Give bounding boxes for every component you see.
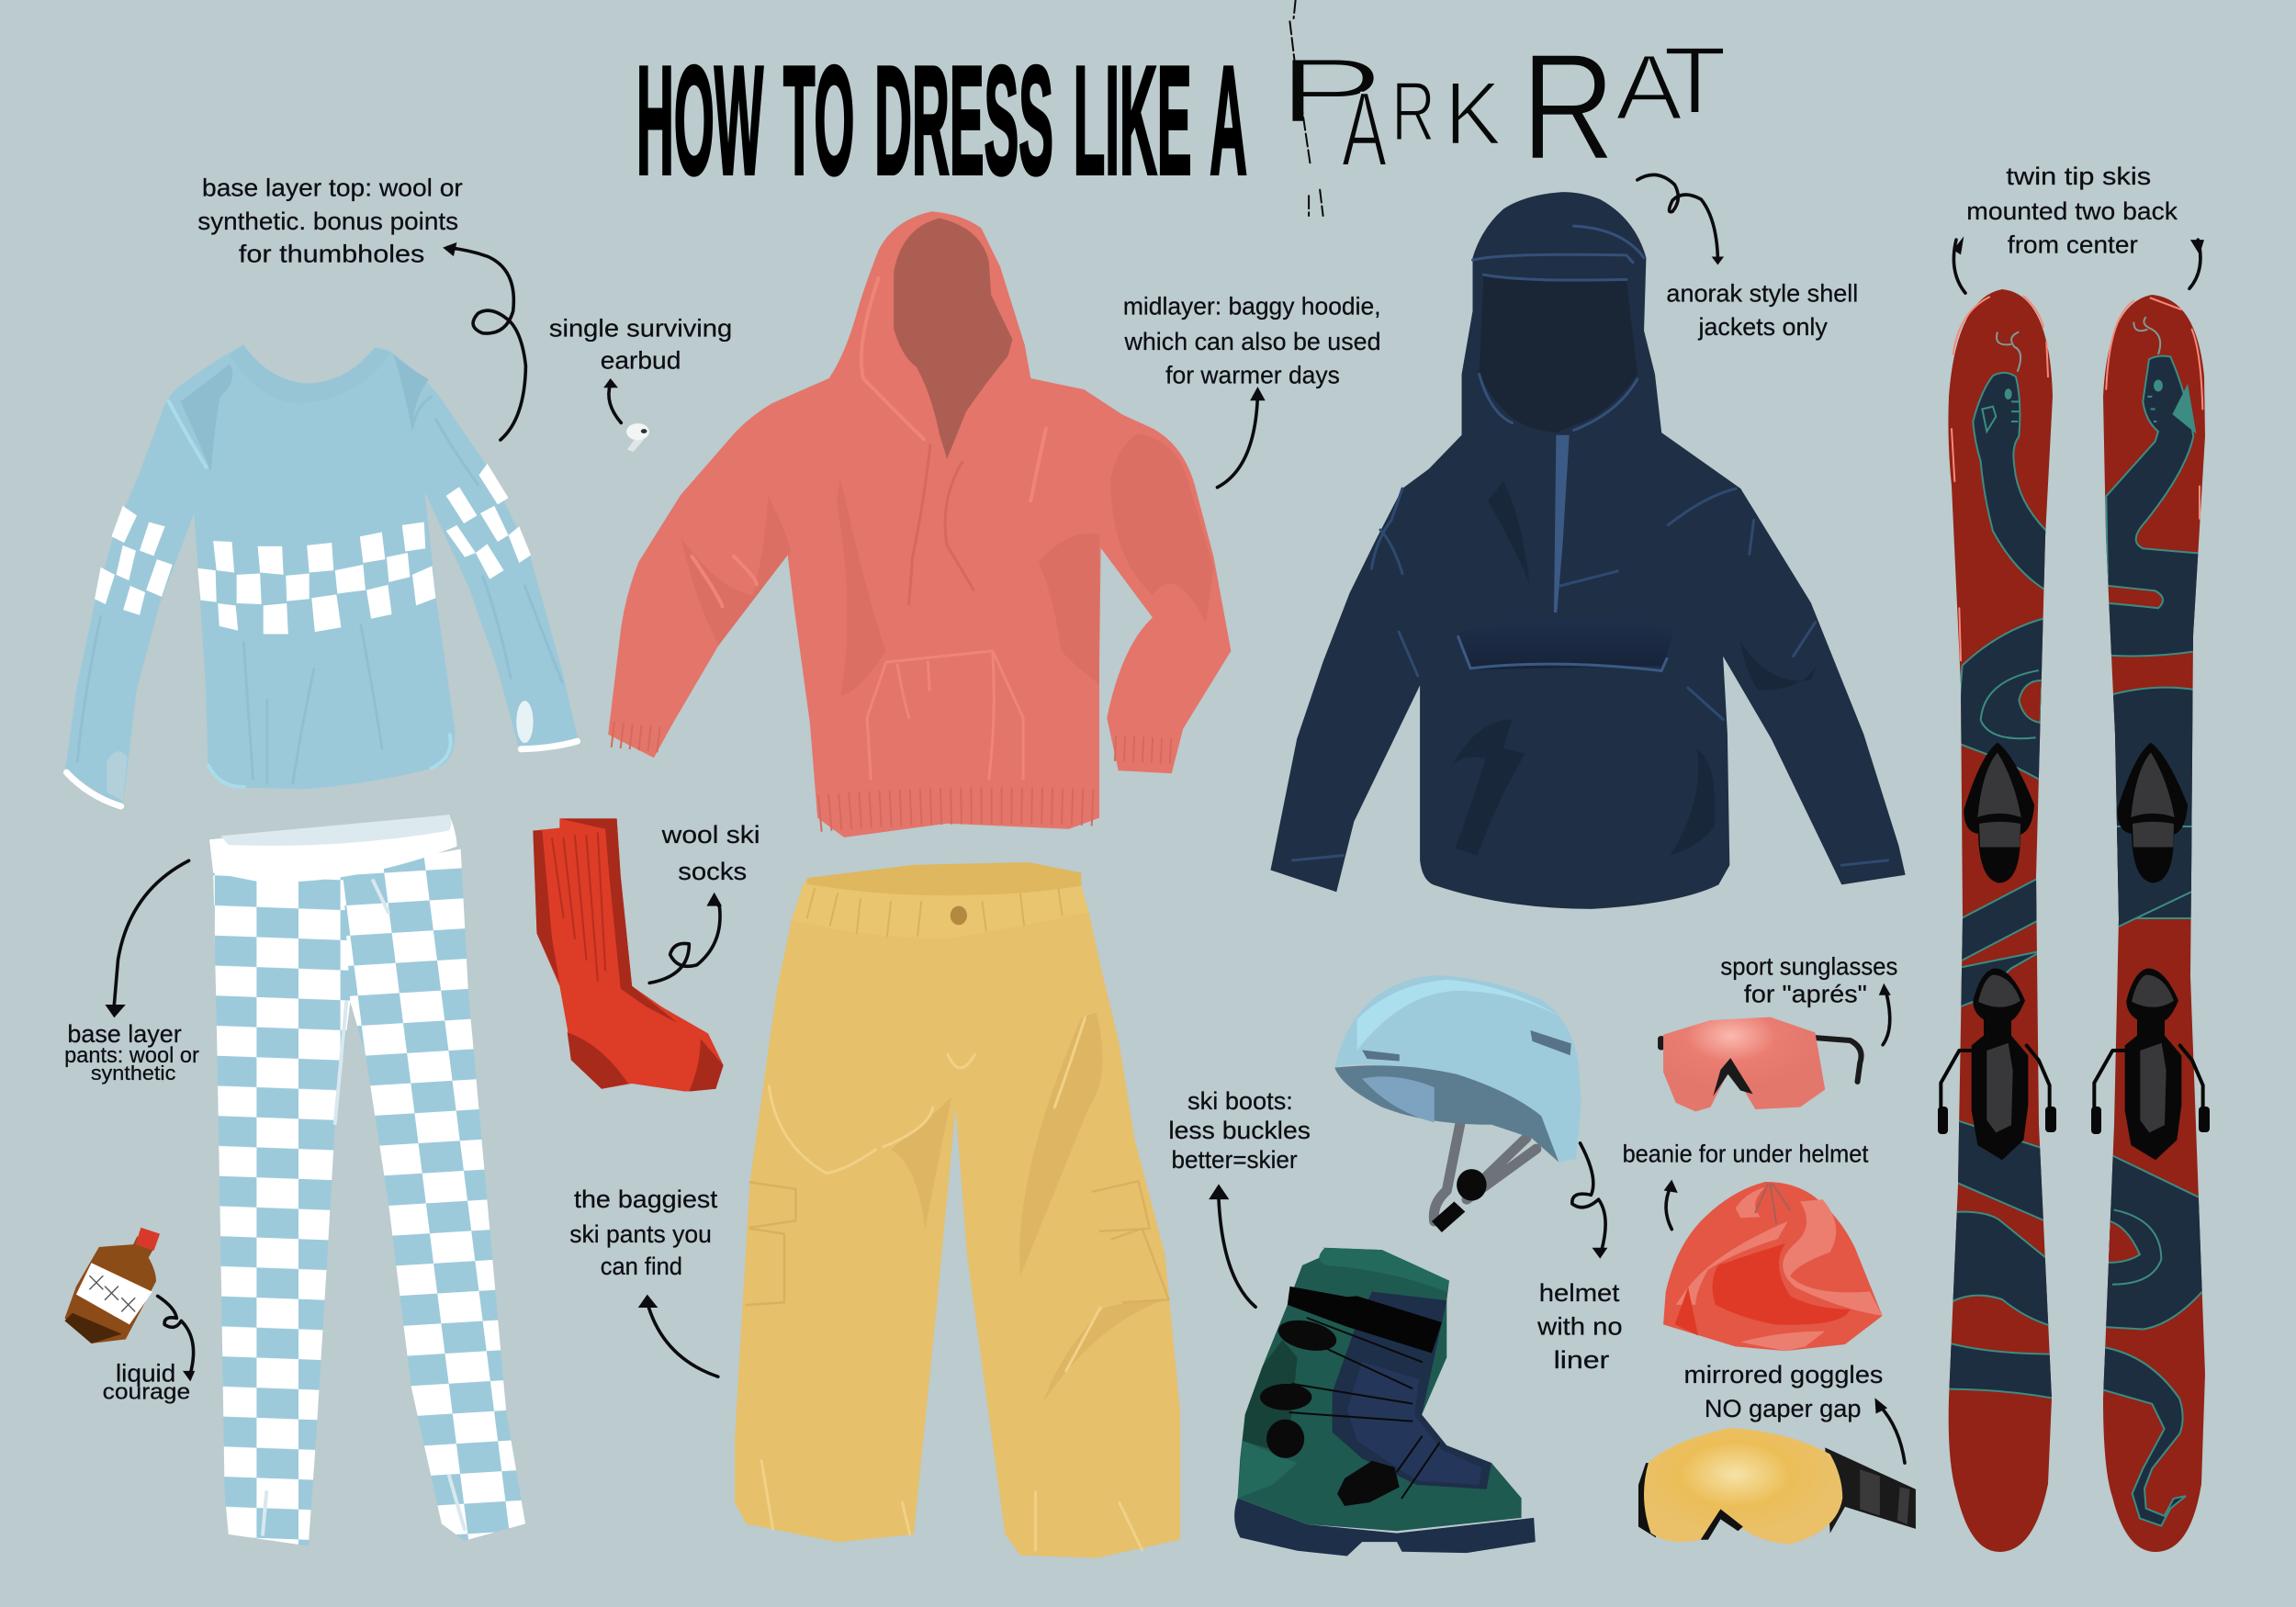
- label: base layer top: base layer top: wool or: [202, 174, 463, 202]
- label: base layer pants: [64, 1019, 199, 1084]
- label xxx: [90, 1276, 135, 1311]
- left sleeve checks: [95, 506, 173, 615]
- nose piece: [1713, 1058, 1753, 1096]
- chest pocket: [1458, 618, 1675, 669]
- label: midlayer: which can also be used: [1124, 327, 1381, 355]
- drawstrings: [909, 445, 974, 603]
- swirl light: [1676, 1187, 1883, 1351]
- arrow: baggiest ski pants: [638, 1295, 718, 1377]
- illustration: hoodie: [608, 211, 1231, 837]
- title: [636, 0, 1727, 216]
- sock heel: [568, 1032, 628, 1089]
- beanie base: [1663, 1182, 1883, 1351]
- illustration: baggy ski pants: [735, 862, 1180, 1558]
- label: ski boots: [1168, 1086, 1311, 1174]
- label: helmet: helmet: [1539, 1278, 1620, 1307]
- zipper: [1554, 435, 1570, 612]
- sock cuff shade: [533, 818, 678, 1023]
- lens: [1644, 1428, 1842, 1545]
- illustration: sport sunglasses: [1658, 1017, 1862, 1111]
- heading: park rat: A: [1615, 37, 1683, 140]
- illustration: base layer pants: [209, 815, 525, 1545]
- illustration: left ski: [1938, 289, 2057, 1552]
- label: socks: socks: [678, 857, 747, 885]
- swirl dark: [1675, 1243, 1850, 1335]
- earbud head: [626, 423, 649, 440]
- label: base layer top: for thumbholes: [239, 239, 424, 267]
- cables: [1289, 1318, 1439, 1498]
- label: base layer top: synthetic. bonus points: [197, 207, 458, 235]
- earbud mesh: [641, 429, 647, 433]
- pants body: [735, 862, 1180, 1558]
- bottle body: [64, 1237, 156, 1343]
- lens: [1663, 1017, 1825, 1111]
- left ski deck: [1948, 289, 2053, 1552]
- label: midlayer: midlayer: baggy hoodie,: [1123, 292, 1381, 320]
- label: base layer pants: base layer: [67, 1019, 182, 1048]
- waistband inner: [220, 815, 451, 846]
- cargo pockets: [747, 1181, 1169, 1305]
- arrows: twin tip skis: [1953, 236, 2204, 293]
- label: base layer top: [197, 174, 463, 267]
- helmet shell: [1334, 975, 1581, 1162]
- left ski edges: [1952, 296, 2048, 660]
- toe buckle: [1337, 1461, 1400, 1506]
- arrow: helmet: [1572, 1143, 1607, 1259]
- buckle one: [1275, 1315, 1340, 1356]
- helmet inner: [1334, 1065, 1559, 1162]
- label: helmet: with no: [1536, 1312, 1623, 1341]
- label: sunglasses: [1720, 951, 1897, 1008]
- label: liquid courage: [103, 1359, 190, 1405]
- shell highlight: [1357, 980, 1561, 1050]
- label: anorak: [1666, 278, 1858, 341]
- label: baggy pants: ski pants you: [569, 1219, 712, 1248]
- annotations: [64, 162, 2178, 1422]
- heading: park rat: P: [1277, 39, 1384, 142]
- heading: park rat: T: [1663, 28, 1727, 134]
- highlights: [761, 1017, 1142, 1550]
- shell shadow: [1243, 1340, 1298, 1455]
- illustration: ski boot: [1234, 1248, 1536, 1556]
- label: liquid courage: liquid: [116, 1359, 175, 1388]
- hem highlight: [169, 401, 451, 787]
- buckle three: [1266, 1420, 1304, 1458]
- arrow: goggles: [1874, 1398, 1905, 1463]
- arrow: anorak: [1638, 174, 1724, 265]
- helmet lining: [1362, 1076, 1435, 1122]
- face opening: [894, 219, 1012, 459]
- arrow: ski boots: [1209, 1184, 1255, 1307]
- chin straps: [1434, 1116, 1536, 1221]
- label: baggy pants: can find: [601, 1252, 682, 1280]
- hem ribbing: [819, 805, 1099, 814]
- label: goggles: NO gaper gap: [1705, 1394, 1861, 1422]
- heading: park rat: A: [1342, 71, 1387, 188]
- shadow folds: [1451, 481, 1819, 856]
- label: midlayer: for warmer days: [1165, 361, 1340, 389]
- label: earbud: [549, 314, 732, 375]
- label: ski boots: better=skier: [1172, 1145, 1298, 1174]
- sock ribs: [552, 833, 605, 981]
- strap clip: [1432, 1202, 1465, 1232]
- label: anorak: jackets only: [1698, 312, 1828, 341]
- pocket trim: [1458, 636, 1667, 670]
- label: goggles: [1684, 1360, 1883, 1422]
- highlights: [692, 278, 1046, 606]
- arrow: liquid courage: [158, 1296, 195, 1381]
- label: socks: [661, 820, 760, 885]
- label: earbud: single surviving: [549, 314, 732, 343]
- sock body: [533, 818, 724, 1092]
- arrow: socks: [649, 893, 722, 983]
- right thumbhole: [516, 701, 534, 743]
- label: beanie: beanie for under helmet: [1623, 1139, 1869, 1167]
- illustration: right ski: [2091, 295, 2210, 1552]
- highlights: [77, 397, 562, 783]
- right ski edges: [2106, 298, 2202, 519]
- face opening: [1480, 275, 1638, 433]
- label: helmet: liner: [1554, 1345, 1609, 1374]
- shoulder shading: [180, 355, 429, 472]
- label: socks: wool ski: [661, 820, 760, 848]
- strap stripes: [1860, 1469, 1909, 1524]
- illustration: helmet: [1334, 975, 1581, 1232]
- body checks: [197, 523, 435, 634]
- heading: park rat: R: [1521, 22, 1615, 191]
- tongue lighter: [1347, 1362, 1481, 1485]
- label: ski boots: ski boots:: [1187, 1086, 1293, 1115]
- left ski bindings: [1938, 743, 2056, 1160]
- waistband: [792, 883, 1089, 938]
- label: goggles: mirrored goggles: [1684, 1360, 1883, 1388]
- label: base layer pants: pants: wool or: [64, 1043, 199, 1068]
- earbud arrow head: [603, 378, 618, 388]
- label: base layer pants: synthetic: [91, 1062, 175, 1084]
- right leg: [343, 849, 525, 1541]
- cuff ribbing: [612, 735, 1176, 751]
- heading: park rat: [1277, 0, 1727, 216]
- right ski deck: [2103, 295, 2205, 1552]
- right sleeve checks: [446, 464, 531, 579]
- vents: [1362, 1030, 1571, 1061]
- boot sole: [1234, 1498, 1536, 1556]
- pocket: [867, 651, 1023, 779]
- right ski snake: [2100, 317, 2204, 1526]
- illustration: wool socks: [533, 818, 724, 1092]
- waistband gathers: [807, 889, 1063, 936]
- bottle label: [76, 1263, 152, 1324]
- illustration: earbud: [603, 378, 649, 452]
- strap buckle: [1457, 1169, 1487, 1201]
- earbud arrow: [609, 384, 621, 422]
- leg split fold: [263, 881, 465, 1534]
- label: twin tip skis: twin tip skis: [2006, 162, 2151, 190]
- waistband: [209, 815, 456, 882]
- label: twin tip skis: mounted two back: [1966, 197, 2178, 225]
- shell highlight: [1238, 1248, 1449, 1498]
- collar: [230, 345, 391, 403]
- label: baggy pants: the baggiest: [574, 1185, 718, 1213]
- beanie crown seams: [1755, 1184, 1790, 1223]
- label: twin tip skis: [1966, 162, 2178, 259]
- label: sunglasses: sport sunglasses: [1720, 951, 1897, 980]
- label: anorak: anorak style shell: [1666, 278, 1858, 307]
- label: sunglasses: for "aprés": [1744, 980, 1867, 1008]
- label: liquid courage: courage: [103, 1380, 190, 1405]
- label: baggy pants: [569, 1185, 718, 1280]
- illustration: mirrored goggles: [1638, 1428, 1916, 1545]
- anorak shell: [1270, 192, 1906, 909]
- right ski bindings: [2091, 743, 2210, 1160]
- shirt body: [65, 345, 579, 807]
- bottle base shade: [64, 1313, 122, 1343]
- frame: [1638, 1463, 1660, 1537]
- label: twin tip skis: from center: [2008, 230, 2138, 259]
- waist top: [807, 862, 1081, 895]
- left ski snake: [1944, 332, 2057, 1399]
- upper strap: [1288, 1287, 1442, 1354]
- left leg: [213, 871, 358, 1545]
- nose edge: [1701, 1509, 1743, 1540]
- shading: [891, 1013, 1165, 1402]
- goggle strap: [1825, 1447, 1916, 1534]
- left hinge: [1658, 1036, 1665, 1050]
- button: [951, 906, 967, 925]
- label: ski boots: less buckles: [1168, 1116, 1311, 1144]
- thumbholes: [107, 751, 128, 801]
- heading: park rat: K: [1445, 63, 1502, 163]
- arrow: base layer top: [443, 242, 525, 440]
- arrow: sunglasses: [1879, 983, 1891, 1045]
- label: midlayer: [1123, 292, 1381, 389]
- sleeve shading: [681, 434, 1213, 695]
- brow pill: [1483, 253, 1633, 282]
- bottle cap: [136, 1228, 160, 1251]
- illustration: anorak: [1270, 192, 1906, 909]
- arrow: hoodie: [1217, 387, 1266, 488]
- arrow: beanie: [1664, 1180, 1678, 1230]
- label: helmet: [1536, 1278, 1623, 1374]
- cuffs: [66, 741, 578, 806]
- buckle two: [1260, 1384, 1311, 1410]
- hood trim: [1472, 226, 1644, 430]
- illustration: base layer top: [65, 345, 579, 807]
- highlight folds: [1292, 489, 1887, 865]
- hoodie body: [608, 211, 1231, 837]
- sunglass arm: [1815, 1038, 1862, 1082]
- label: earbud: earbud: [601, 346, 681, 375]
- illustration: liquor bottle: [64, 1228, 160, 1343]
- heading: park rat: R: [1391, 65, 1435, 159]
- arrow: base layer pants: [105, 860, 189, 1017]
- sock toe: [689, 1039, 724, 1092]
- illustration: beanie: [1663, 1182, 1883, 1351]
- boot tongue: [1333, 1292, 1491, 1489]
- boot shell: [1238, 1248, 1522, 1531]
